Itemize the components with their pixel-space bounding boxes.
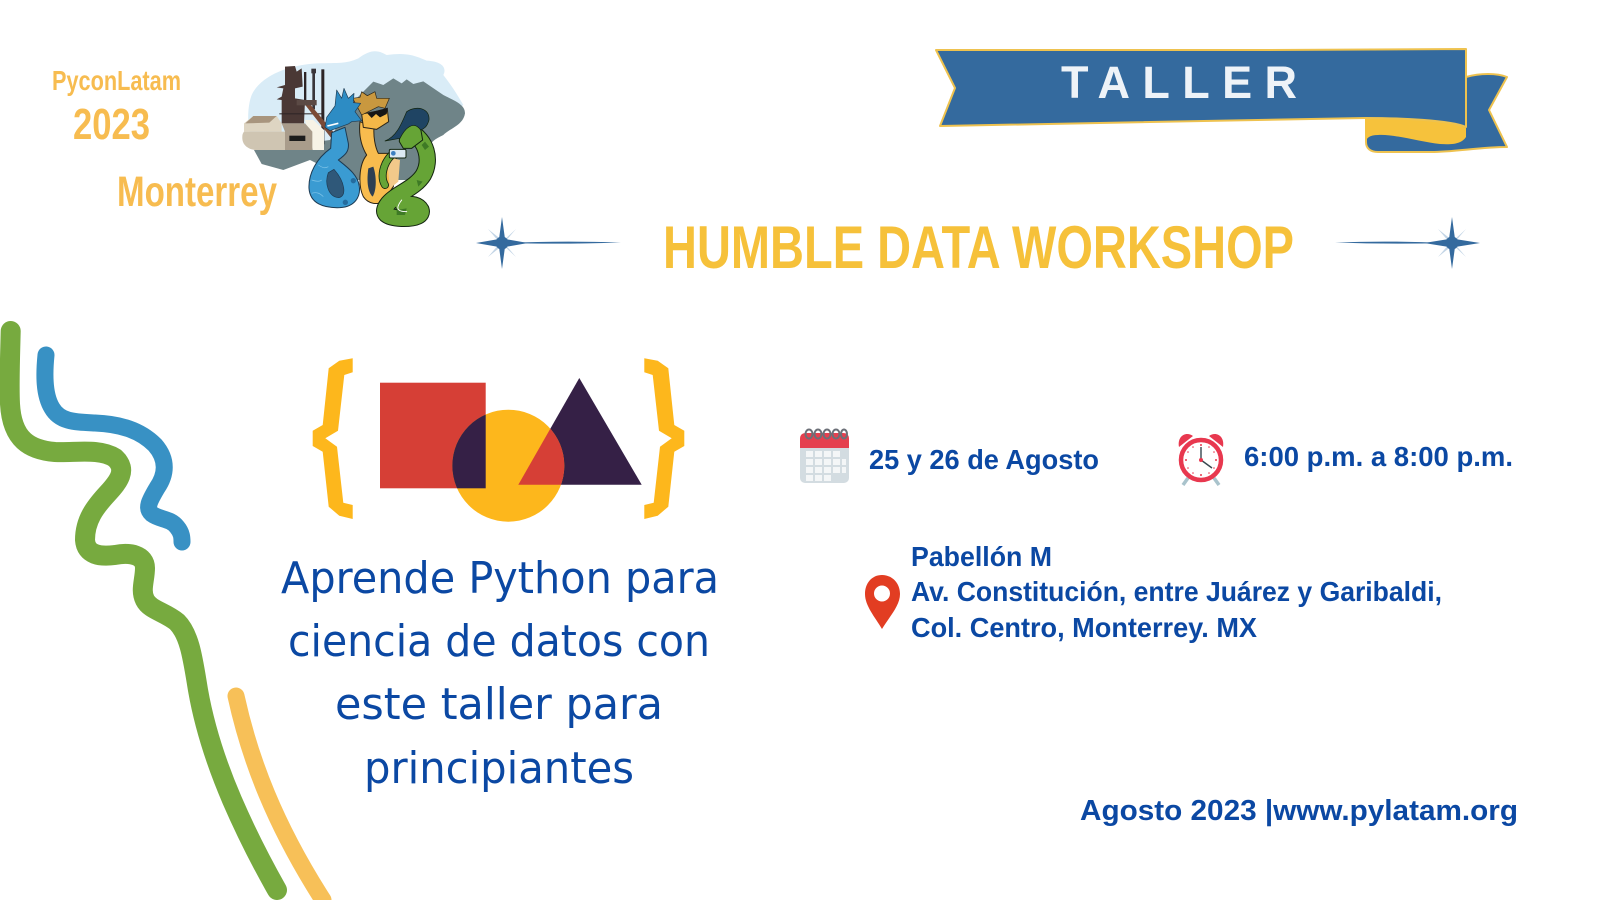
logo: braces with shapes [313,358,684,522]
event name: PyconLatam 2023 Monterrey: Monterrey [117,168,277,216]
icon: calendar [800,430,849,483]
event name: PyconLatam 2023 Monterrey: PyconLatam [52,65,181,96]
event name: PyconLatam 2023 Monterrey: 2023 [73,100,150,149]
decorative star right [1335,217,1480,269]
time: 6:00 p.m. a 8:00 p.m. [1244,441,1513,472]
title: Humble Data Workshop: HUMBLE DATA WORKSHOP [663,214,1294,281]
address [911,541,1442,643]
building [242,116,324,150]
illustration: steelworks and three snake mascots [242,51,465,218]
mascot: green snake with phone [383,108,429,218]
mascot: yellow dragon [353,92,400,204]
icon: location pin [865,575,900,629]
tagline: Aprende Python para [281,553,719,604]
ribbon banner: TALLER [936,49,1507,152]
decorative green wave [10,331,277,890]
decorative star left [476,217,621,269]
banner label: TALLER [1061,57,1297,108]
mascot: blue dragon [309,88,362,208]
address: Av. Constitución, entre Juárez y Garibaldi, [911,576,1442,607]
tagline: principiantes [364,743,634,794]
decorative blue wave [45,355,182,542]
tagline: ciencia de datos con [288,616,710,667]
icon: alarm clock [1179,434,1223,485]
date: 25 y 26 de Agosto [869,444,1099,475]
stacks and tower [277,66,336,144]
address: Col. Centro, Monterrey. MX [911,612,1257,643]
address: Pabellón M [911,541,1052,572]
footer: date and website: Agosto 2023 |www.pylatam.org [1080,795,1518,827]
tagline: este taller para [335,679,663,730]
decorative orange arc [236,696,323,900]
tagline [281,553,719,794]
event name: PyconLatam 2023 Monterrey [52,65,277,216]
